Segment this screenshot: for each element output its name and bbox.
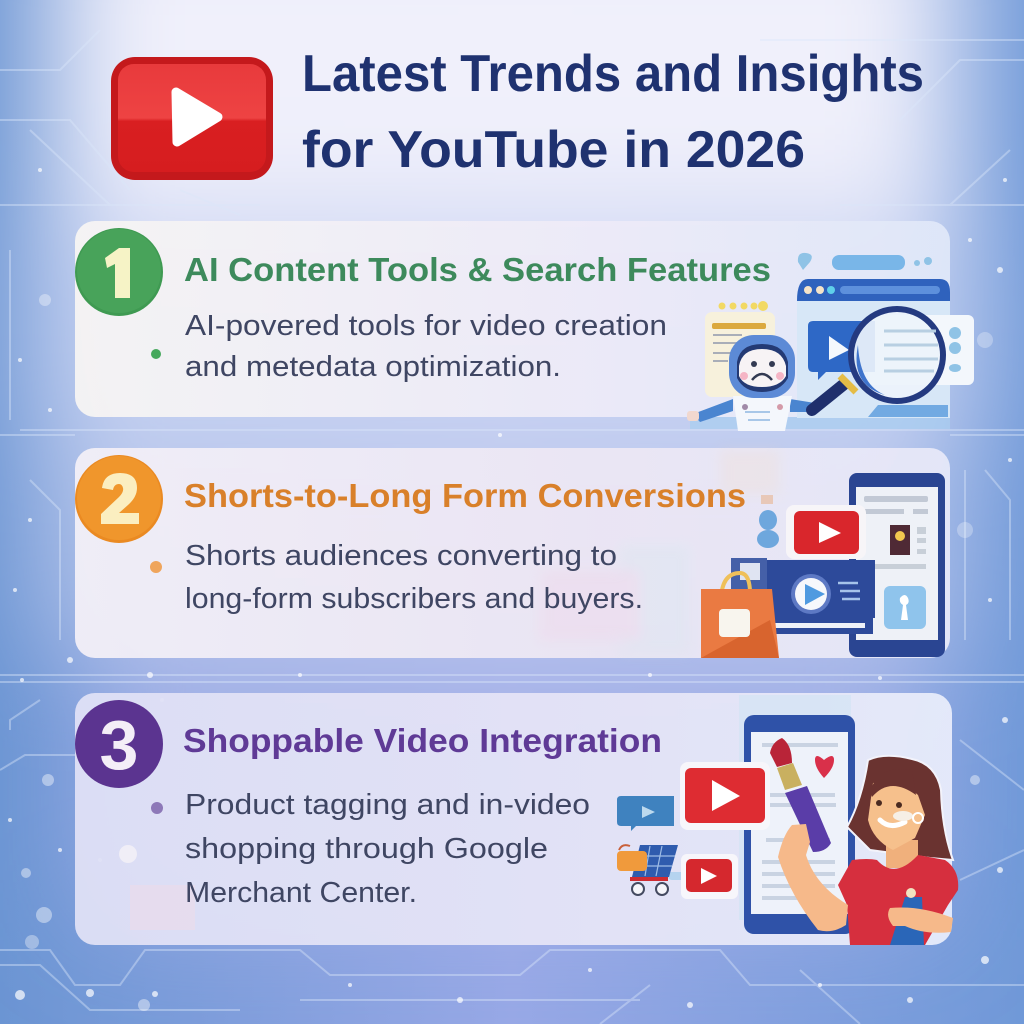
number badge 3: 3	[100, 706, 138, 784]
lipstick	[770, 738, 831, 852]
YouTube logo	[111, 57, 273, 180]
icon: play triangle	[176, 92, 218, 142]
description	[185, 789, 590, 909]
heading: AI Content Tools & Search Features	[184, 251, 771, 288]
description	[185, 540, 643, 615]
description: shopping through Google	[185, 833, 548, 865]
panel: Shoppable video	[75, 693, 958, 945]
number badge 3	[75, 700, 163, 788]
heading: Shoppable Video Integration	[183, 722, 662, 759]
magnifier	[812, 309, 943, 410]
description: and metedata optimization.	[185, 351, 561, 383]
description: AI-povered tools for video creation	[185, 310, 667, 342]
bullet	[151, 802, 163, 814]
description: Merchant Center.	[185, 877, 417, 909]
panel: Shorts conversions	[75, 448, 950, 658]
heading: Shorts-to-Long Form Conversions	[184, 477, 746, 514]
number badge 1	[75, 228, 163, 316]
title: for YouTube in 2026	[302, 121, 805, 179]
woman	[778, 756, 958, 945]
illustration: browser, robot and magnifier	[687, 253, 974, 431]
description: Product tagging and in-video	[185, 789, 590, 821]
title: Latest Trends and Insights	[302, 45, 924, 103]
shopping bag	[701, 573, 779, 658]
bullet	[150, 561, 162, 573]
title	[302, 45, 924, 179]
illustration: phone, video player and shopping bag	[701, 473, 945, 658]
robot	[687, 335, 815, 431]
panel: AI content tools	[75, 221, 974, 431]
description: Shorts audiences converting to	[185, 540, 617, 572]
video cards	[617, 762, 770, 899]
shopping cart	[617, 845, 678, 895]
bullet	[151, 349, 161, 359]
illustration: phone, video cards and woman with lipstick	[617, 695, 958, 945]
description: long-form subscribers and buyers.	[185, 583, 643, 615]
description	[185, 310, 667, 383]
number badge 2	[75, 455, 163, 543]
